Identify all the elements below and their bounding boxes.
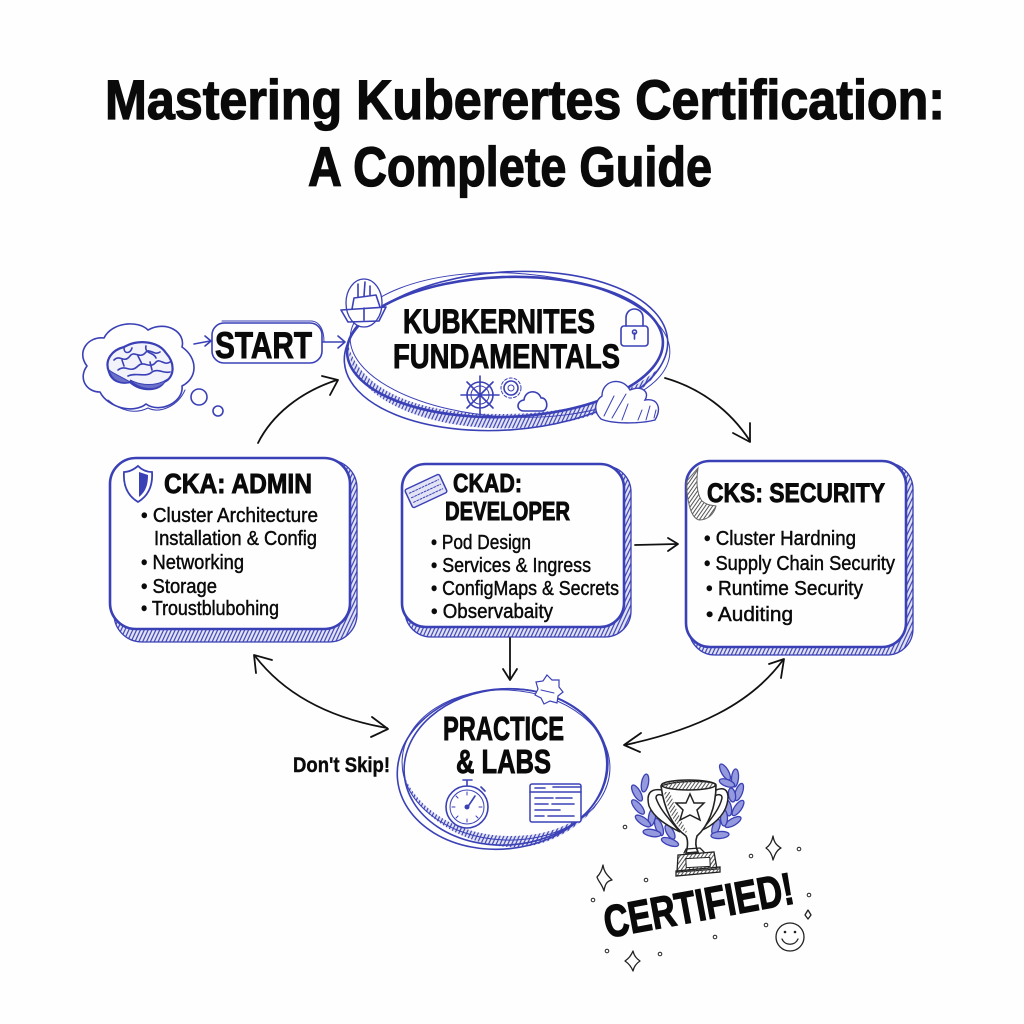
title: A Complete Guide <box>308 135 712 198</box>
arrow: security and practice <box>624 659 784 752</box>
panel: CKS security <box>686 461 913 655</box>
icon: ship <box>341 279 386 327</box>
bullet list: • Supply Chain Security <box>704 553 895 575</box>
heading: CKA: ADMIN <box>164 468 312 499</box>
arrow: developer to security <box>635 538 678 551</box>
icon: trophy with laurels <box>629 762 746 876</box>
heading <box>393 303 620 376</box>
title <box>105 68 945 198</box>
arrow: start to fundamentals <box>323 336 345 348</box>
arrow: admin and practice <box>254 655 388 737</box>
base <box>677 852 717 872</box>
heading: FUNDAMENTALS <box>393 338 620 376</box>
certified label: CERTIFIED! <box>600 863 798 948</box>
bullet list: • Pod Design <box>431 532 531 554</box>
heading <box>445 468 570 526</box>
bullet list <box>704 528 895 626</box>
bullet list: • Cluster Hardning <box>704 528 856 550</box>
icon: sparkles and dots <box>591 825 811 971</box>
laurel leaves <box>629 762 746 848</box>
icon: smiley <box>776 923 804 951</box>
icon: tool scribble <box>686 468 716 520</box>
bullet list: Installation & Config <box>154 528 317 550</box>
arrow: fundamentals to security <box>665 378 750 442</box>
bullet list: • Runtime Security <box>706 578 863 600</box>
icon: browser window <box>530 784 581 822</box>
icon: large cloud <box>596 381 658 423</box>
bullet list <box>141 505 318 620</box>
icon: small cloud <box>518 392 547 411</box>
title: Mastering Kuberertes Certification: <box>105 68 945 131</box>
icon: shield <box>124 466 152 502</box>
label: don't skip: Don't Skip! <box>293 754 390 777</box>
bullet list <box>431 532 619 623</box>
heading: CKS: SECURITY <box>707 478 885 508</box>
arrow: brain to start <box>194 336 211 346</box>
bullet list: • Observabaity <box>431 601 553 623</box>
heading: DEVELOPER <box>445 496 570 526</box>
thought cloud with brain <box>83 324 223 416</box>
heading: & LABS <box>456 743 551 780</box>
bullet list: • Networking <box>141 552 244 574</box>
heading: PRACTICE <box>443 710 564 747</box>
panel: CKAD developer <box>402 464 631 637</box>
icon: keyboard <box>405 474 447 508</box>
panel: CKA admin <box>110 458 357 642</box>
cup <box>661 781 716 853</box>
heading <box>443 710 564 780</box>
icon: gear <box>501 378 521 398</box>
bullet list: • Storage <box>141 576 217 598</box>
icon: padlock <box>621 309 648 346</box>
icon: stopwatch <box>446 780 488 828</box>
start box: START <box>215 325 312 366</box>
panel: kubernetes fundamentals <box>339 261 674 441</box>
star <box>676 794 704 820</box>
handles <box>648 789 728 832</box>
icon: brain <box>107 342 173 389</box>
bullet list: • ConfigMaps & Secrets <box>431 578 619 600</box>
icon: ship wheel <box>461 376 499 414</box>
arrow: developer to practice <box>503 638 517 680</box>
bullet list: • Auditing <box>706 604 793 626</box>
bullet list: • Cluster Architecture <box>141 505 318 527</box>
bullet list: • Services & Ingress <box>431 555 591 577</box>
icon: badge <box>535 675 563 704</box>
panel: practice and labs <box>389 675 615 860</box>
heading: CKAD: <box>453 468 522 498</box>
bullet list: • Troustblubohing <box>141 598 279 620</box>
heading: KUBKERNITES <box>403 303 595 341</box>
arrow: admin to fundamentals <box>258 376 338 443</box>
